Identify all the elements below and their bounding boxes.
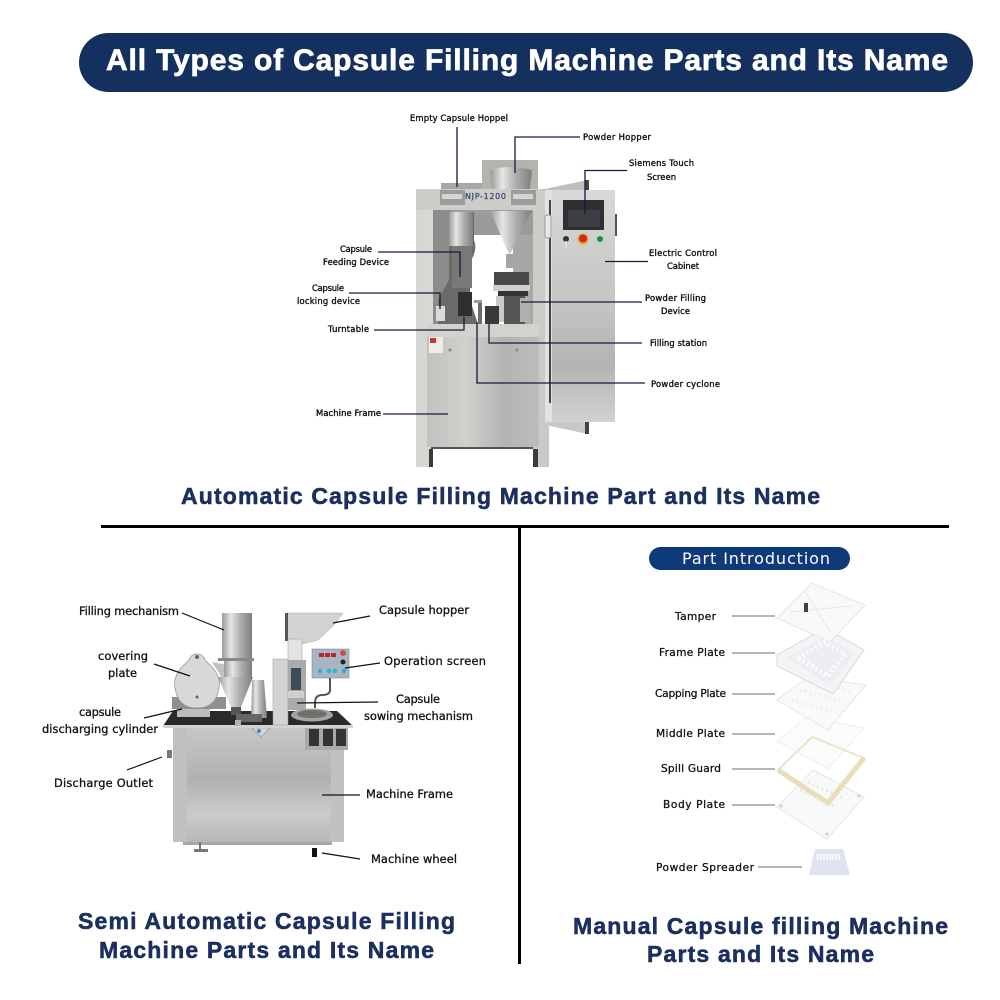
top crossbar with model name <box>416 189 549 210</box>
label: Machine wheel: Machine wheel <box>371 852 457 866</box>
label: covering plate: covering <box>98 649 148 663</box>
label: Tamper <box>674 611 775 623</box>
vertical divider <box>518 527 521 964</box>
label: Discharge Outlet: Discharge Outlet <box>54 776 154 790</box>
label: Siemens Touch Screen: Siemens Touch <box>629 158 694 168</box>
label: Electric Control Cabinet <box>605 248 717 271</box>
label: Filling mechanism: Filling mechanism <box>79 604 179 618</box>
label: Spill Guard <box>661 763 775 775</box>
heading: manual machine <box>573 913 948 967</box>
machine cabinet <box>167 728 348 845</box>
part introduction pill <box>649 547 850 570</box>
label: capsule discharging cylinder: discharging cylinder <box>42 722 158 736</box>
control buttons <box>563 234 603 248</box>
label: Siemens Touch Screen <box>585 158 694 214</box>
filling column and cone <box>212 613 267 726</box>
label: capsule discharging cylinder <box>42 705 182 736</box>
sowing disc <box>291 708 333 722</box>
label: Operation screen: Operation screen <box>384 654 486 668</box>
label: Machine Frame: Machine Frame <box>316 408 381 418</box>
label: Empty Capsule Hoppel <box>410 113 508 187</box>
label: Spill Guard: Spill Guard <box>661 763 721 775</box>
label: Powder Spreader: Powder Spreader <box>656 862 755 874</box>
heading: semi automatic machine: Semi Automatic Capsule Filling <box>78 908 455 934</box>
label: Capsule hopper <box>333 603 469 623</box>
touch screen <box>563 200 604 230</box>
label: Body Plate <box>663 799 775 811</box>
plate: tamper <box>777 583 865 642</box>
label: Powder cyclone <box>477 322 720 389</box>
heading: automatic machine: Automatic Capsule Filling Machine Part and Its Name <box>181 483 820 509</box>
title banner <box>79 33 973 92</box>
label: Powder Filling Device: Device <box>661 306 690 316</box>
sowing column <box>273 659 306 725</box>
label: capsule discharging cylinder: capsule <box>79 705 121 719</box>
powder spreader <box>809 849 850 875</box>
capsule hopper <box>285 613 343 661</box>
label: Frame Plate: Frame Plate <box>659 647 725 659</box>
label: Frame Plate <box>659 647 775 659</box>
base panel divider <box>427 324 539 337</box>
label: Capsule Feeding Device: Capsule <box>340 244 372 254</box>
label: Turntable <box>327 317 464 334</box>
label: Powder cyclone: Powder cyclone <box>651 379 720 389</box>
label: Capsule locking device <box>297 283 440 309</box>
title banner: All Types of Capsule Filling Machine Parts and Its Name <box>106 44 948 77</box>
label: Tamper: Tamper <box>674 611 717 623</box>
label: Capsule sowing mechanism: sowing mechanism <box>364 709 473 723</box>
heading: manual machine: Manual Capsule filling Machine <box>573 913 948 939</box>
door hinges <box>540 180 589 434</box>
label: Middle Plate: Middle Plate <box>656 728 725 740</box>
label: Capping Plate <box>655 688 775 700</box>
label: Capsule hopper: Capsule hopper <box>379 603 469 617</box>
label: Turntable: Turntable <box>327 324 369 334</box>
label: Siemens Touch Screen: Screen <box>647 172 676 182</box>
label: Capsule locking device: Capsule <box>312 283 344 293</box>
label: Empty Capsule Hoppel: Empty Capsule Hoppel <box>410 113 508 123</box>
label: Body Plate: Body Plate <box>663 799 725 811</box>
heading: semi automatic machine: Machine Parts and Its Name <box>99 937 434 963</box>
plate: capping <box>777 677 866 730</box>
label: Machine wheel <box>322 852 457 866</box>
label: Capsule Feeding Device: Feeding Device <box>323 257 389 267</box>
automatic capsule filling machine illustration <box>297 113 720 468</box>
label: Electric Control Cabinet: Cabinet <box>667 261 700 271</box>
label: Capsule sowing mechanism: Capsule <box>396 692 440 706</box>
label: Electric Control Cabinet: Electric Control <box>649 248 717 258</box>
heading: manual machine: Parts and Its Name <box>647 941 874 967</box>
label: Filling station: Filling station <box>650 338 707 348</box>
label: Capsule locking device: locking device <box>297 296 360 306</box>
label: Machine Frame <box>322 787 453 801</box>
plate: spill guard <box>778 737 864 803</box>
horizontal divider <box>101 525 949 528</box>
plate: body <box>777 770 864 839</box>
label: Discharge Outlet <box>54 757 162 790</box>
filling window with mechanism <box>433 210 533 324</box>
label: Capsule Feeding Device <box>323 244 460 277</box>
label: Machine Frame <box>316 408 448 418</box>
electric control cabinet door <box>545 190 617 422</box>
label: Powder Hopper: Powder Hopper <box>583 132 652 142</box>
label: Powder Filling Device: Powder Filling <box>645 293 706 303</box>
semi automatic machine illustration <box>42 603 486 866</box>
plate: frame <box>777 628 864 694</box>
table top <box>163 711 353 728</box>
top crossbar with model name: NJP-1200 <box>465 192 506 201</box>
label: Middle Plate <box>656 728 775 740</box>
machine feet <box>194 842 317 857</box>
label: covering plate: plate <box>108 666 137 680</box>
machine main body <box>416 189 549 468</box>
label: Filling station <box>489 324 707 348</box>
label: Machine Frame: Machine Frame <box>366 787 453 801</box>
label: Capping Plate: Capping Plate <box>655 688 726 700</box>
plate: middle <box>777 717 864 769</box>
part introduction pill: Part Introduction <box>682 549 830 568</box>
label: Capsule sowing mechanism <box>297 692 473 723</box>
label: Filling mechanism <box>79 604 224 630</box>
back plate and powder hopper <box>441 160 538 190</box>
label: Powder Hopper <box>515 132 652 173</box>
covering plate with cylinder <box>172 654 226 717</box>
label: Powder Filling Device <box>521 293 706 316</box>
heading: semi automatic machine <box>78 908 455 963</box>
label: covering plate <box>98 649 190 680</box>
manual plates exploded stack <box>655 583 866 875</box>
operation screen panel <box>312 649 349 708</box>
